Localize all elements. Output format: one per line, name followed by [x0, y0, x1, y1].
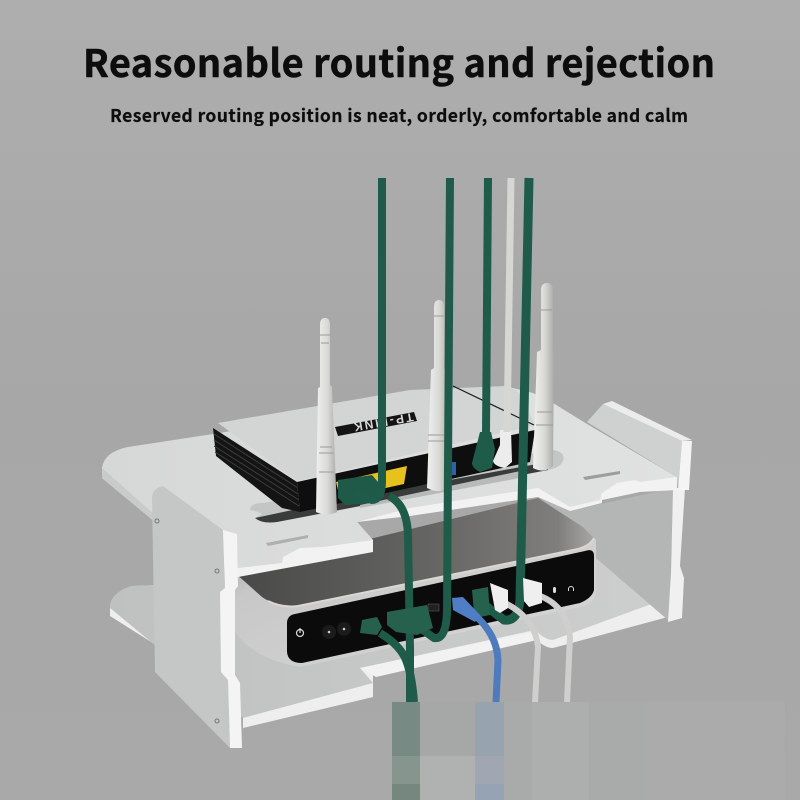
blue port	[449, 462, 456, 475]
shelf top face	[102, 386, 677, 568]
subtitle: Reserved routing position is neat, orderly, comfortable and calm	[110, 103, 688, 128]
cable three	[486, 178, 488, 433]
blue cable	[477, 617, 498, 702]
white USB connector left	[490, 583, 508, 613]
upright edge	[220, 530, 242, 748]
router top face	[218, 386, 535, 481]
right upright front strip	[668, 488, 685, 622]
silver rim line	[268, 538, 594, 606]
silver body	[233, 498, 596, 667]
screws	[155, 519, 219, 723]
diagonal line	[453, 386, 534, 425]
logo text: TP-LINK	[353, 410, 414, 434]
upright face	[152, 486, 230, 748]
upright inner face	[587, 404, 682, 488]
cable five	[389, 496, 410, 702]
white cable one	[505, 603, 538, 702]
green angled connector	[472, 432, 495, 472]
cable six	[380, 633, 414, 702]
logo band	[335, 412, 417, 436]
yellow ports	[336, 466, 407, 498]
left tab slit	[266, 535, 308, 546]
blue connector	[452, 597, 480, 622]
right upright back panel	[538, 488, 673, 621]
upright top edge	[603, 401, 692, 441]
router left vents	[213, 428, 300, 512]
antenna middle	[427, 300, 449, 491]
USB port	[428, 604, 439, 611]
upright bright edge	[678, 441, 692, 490]
antenna rings	[319, 310, 553, 472]
right tab slit	[583, 471, 620, 480]
dark top face	[234, 498, 594, 606]
lower shelf	[110, 556, 668, 728]
title: Reasonable routing and rejection	[83, 33, 715, 88]
antenna right	[533, 283, 554, 471]
shelf edges	[102, 468, 677, 577]
green VGA connector	[387, 605, 433, 635]
green cables	[354, 178, 529, 702]
green router connector left	[338, 475, 384, 505]
right upright	[587, 401, 692, 490]
power icon	[296, 628, 304, 636]
cable two	[420, 178, 450, 638]
green LAN connector	[360, 617, 382, 635]
power socket	[322, 622, 351, 639]
black port panel	[287, 550, 594, 663]
audio jacks	[553, 586, 574, 593]
white USB connector right	[523, 578, 542, 607]
cable slot	[250, 450, 564, 522]
gray cable	[507, 178, 511, 432]
white cables	[505, 595, 570, 702]
green connector right	[472, 587, 490, 617]
router rear panel	[297, 430, 535, 512]
shelf under-router strip	[360, 470, 525, 508]
router	[213, 386, 535, 512]
antenna left	[316, 318, 337, 514]
white angled connector	[493, 430, 512, 468]
cable one	[354, 178, 382, 500]
cable four	[486, 178, 529, 620]
top shelf	[102, 386, 677, 577]
left upright	[152, 486, 242, 748]
pixelated mosaic area	[392, 702, 785, 800]
white cable two	[537, 595, 570, 702]
mini PC	[233, 498, 596, 667]
